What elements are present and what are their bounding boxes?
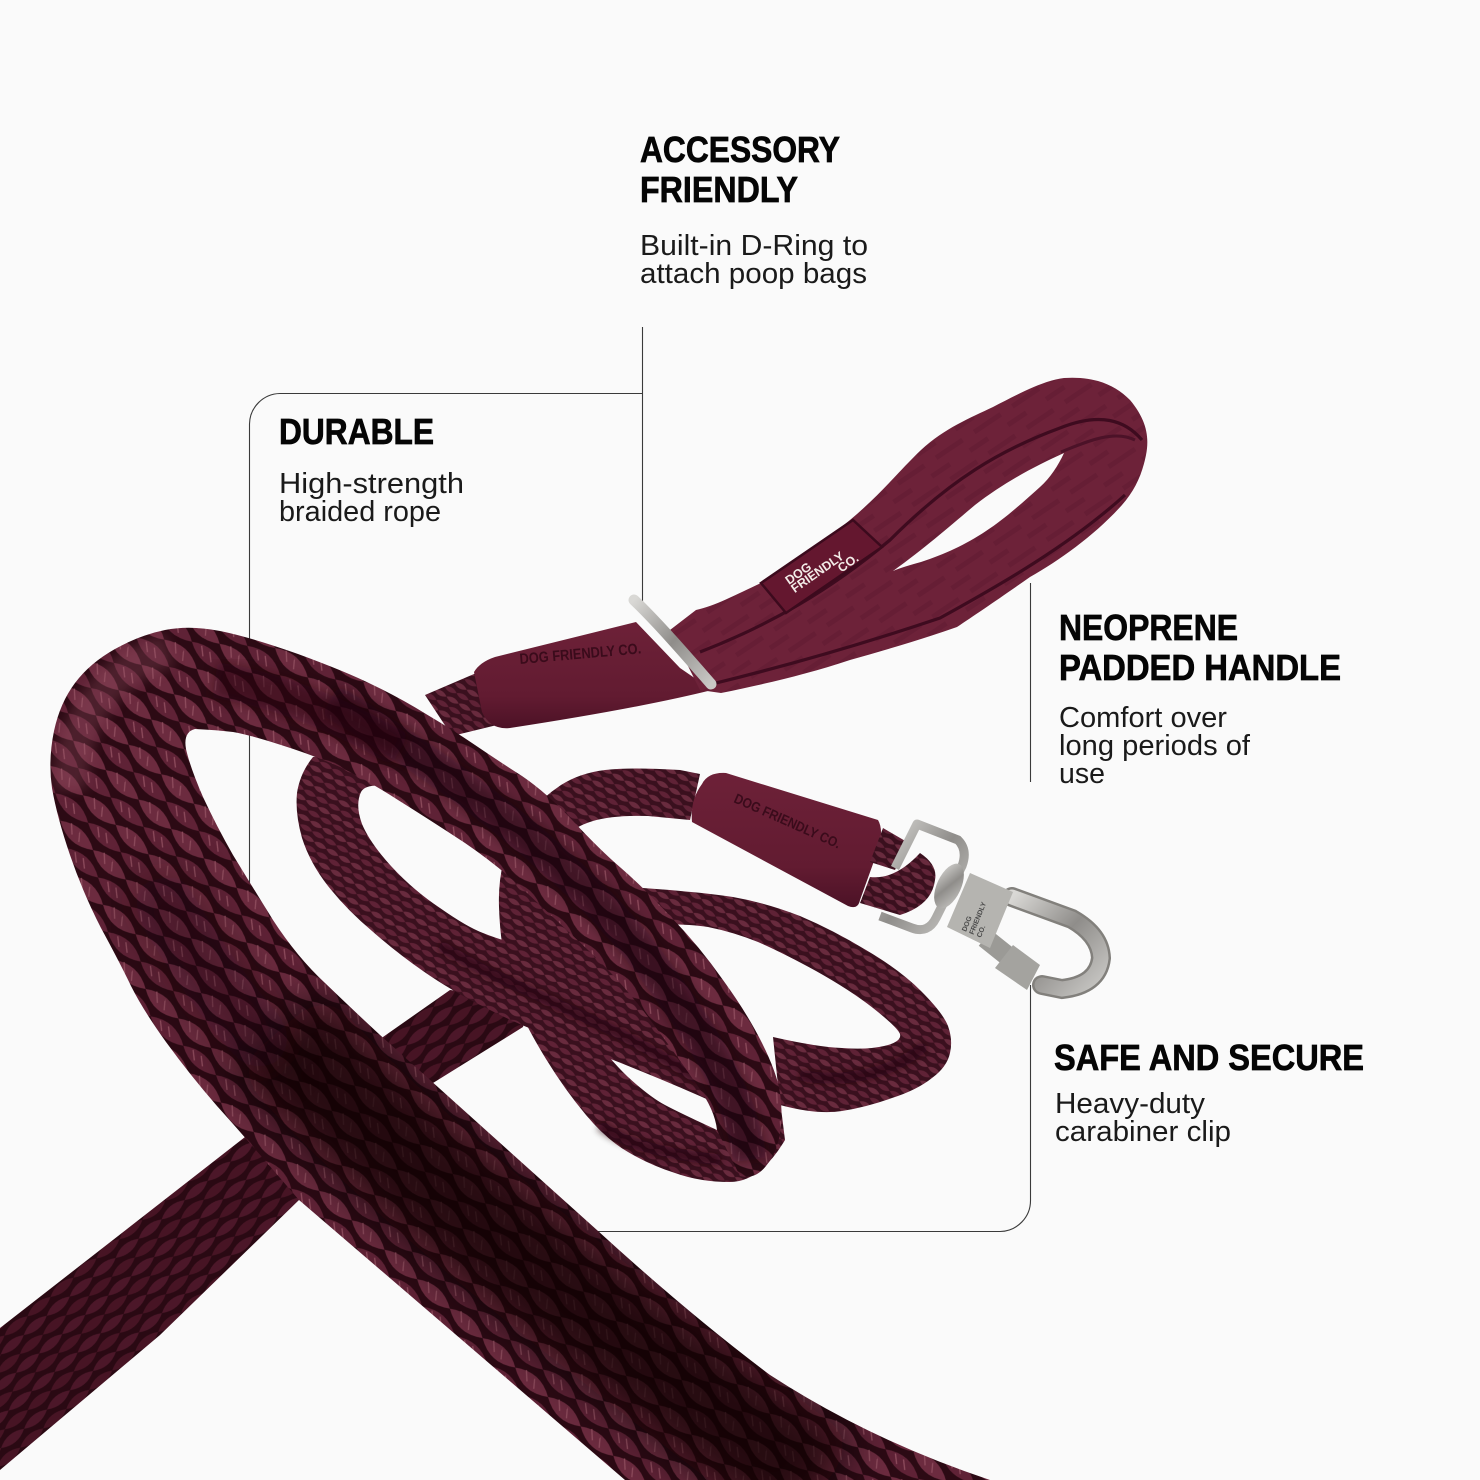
handle stitching and edge shading	[700, 419, 1142, 684]
heading: PADDED HANDLE	[1059, 647, 1341, 688]
carabiner clip	[860, 824, 1101, 990]
carabiner clip: CO.	[976, 925, 987, 939]
feature: neoprene padded handle	[1059, 607, 1341, 790]
heading: NEOPRENE	[1059, 607, 1238, 648]
top rope collar: DOG FRIENDLY CO.	[519, 640, 642, 668]
swivel d-ring	[880, 824, 964, 930]
brand patch	[761, 520, 882, 613]
feature: accessory friendly	[640, 129, 868, 290]
description: Heavy-duty	[1055, 1088, 1206, 1120]
shading on small ropes	[440, 945, 925, 1160]
lower rope collar	[692, 773, 881, 907]
leash product illustration	[0, 378, 1147, 1480]
brand patch: CO.	[835, 551, 861, 575]
rear rope strand	[0, 990, 530, 1470]
description: use	[1059, 758, 1105, 790]
rope entering top collar	[425, 665, 497, 736]
brand patch: DOG	[783, 560, 814, 587]
middle loop filler behind the large rope	[530, 875, 645, 1003]
feature: durable	[279, 411, 464, 528]
rope through ring	[860, 853, 935, 915]
description: Built-in D-Ring to	[640, 230, 868, 262]
callout connector lines	[250, 327, 1031, 1232]
clip body	[947, 873, 1013, 948]
feature: safe and secure	[1054, 1037, 1364, 1148]
description: attach poop bags	[640, 258, 867, 290]
brand patch: FRIENDLY	[788, 549, 847, 596]
heading: FRIENDLY	[640, 169, 798, 210]
swivel barrel	[928, 859, 970, 913]
inner rope loop	[297, 745, 720, 1105]
description: carabiner clip	[1055, 1116, 1231, 1148]
heading: SAFE AND SECURE	[1054, 1037, 1364, 1078]
carabiner clip: DOG	[961, 915, 974, 933]
neoprene padded handle	[670, 378, 1147, 693]
description: braided rope	[279, 496, 441, 528]
description: Comfort over	[1059, 702, 1227, 734]
clip neck	[985, 938, 1010, 958]
heading: DURABLE	[279, 411, 434, 452]
lower rope collar: DOG FRIENDLY CO.	[732, 790, 843, 852]
locking sleeve	[995, 945, 1040, 990]
rope behind ring	[870, 828, 907, 870]
large foreground braided rope	[50, 628, 990, 1480]
heading: ACCESSORY	[640, 129, 840, 170]
thin outer rope loop	[620, 885, 951, 1112]
top rope collar	[474, 622, 712, 728]
description: long periods of	[1059, 730, 1251, 762]
carabiner clip: FRIENDLY	[969, 901, 988, 936]
hook	[1012, 897, 1101, 989]
d-ring on handle	[634, 600, 711, 684]
description: High-strength	[279, 468, 464, 500]
middle rope loop	[499, 768, 785, 1182]
